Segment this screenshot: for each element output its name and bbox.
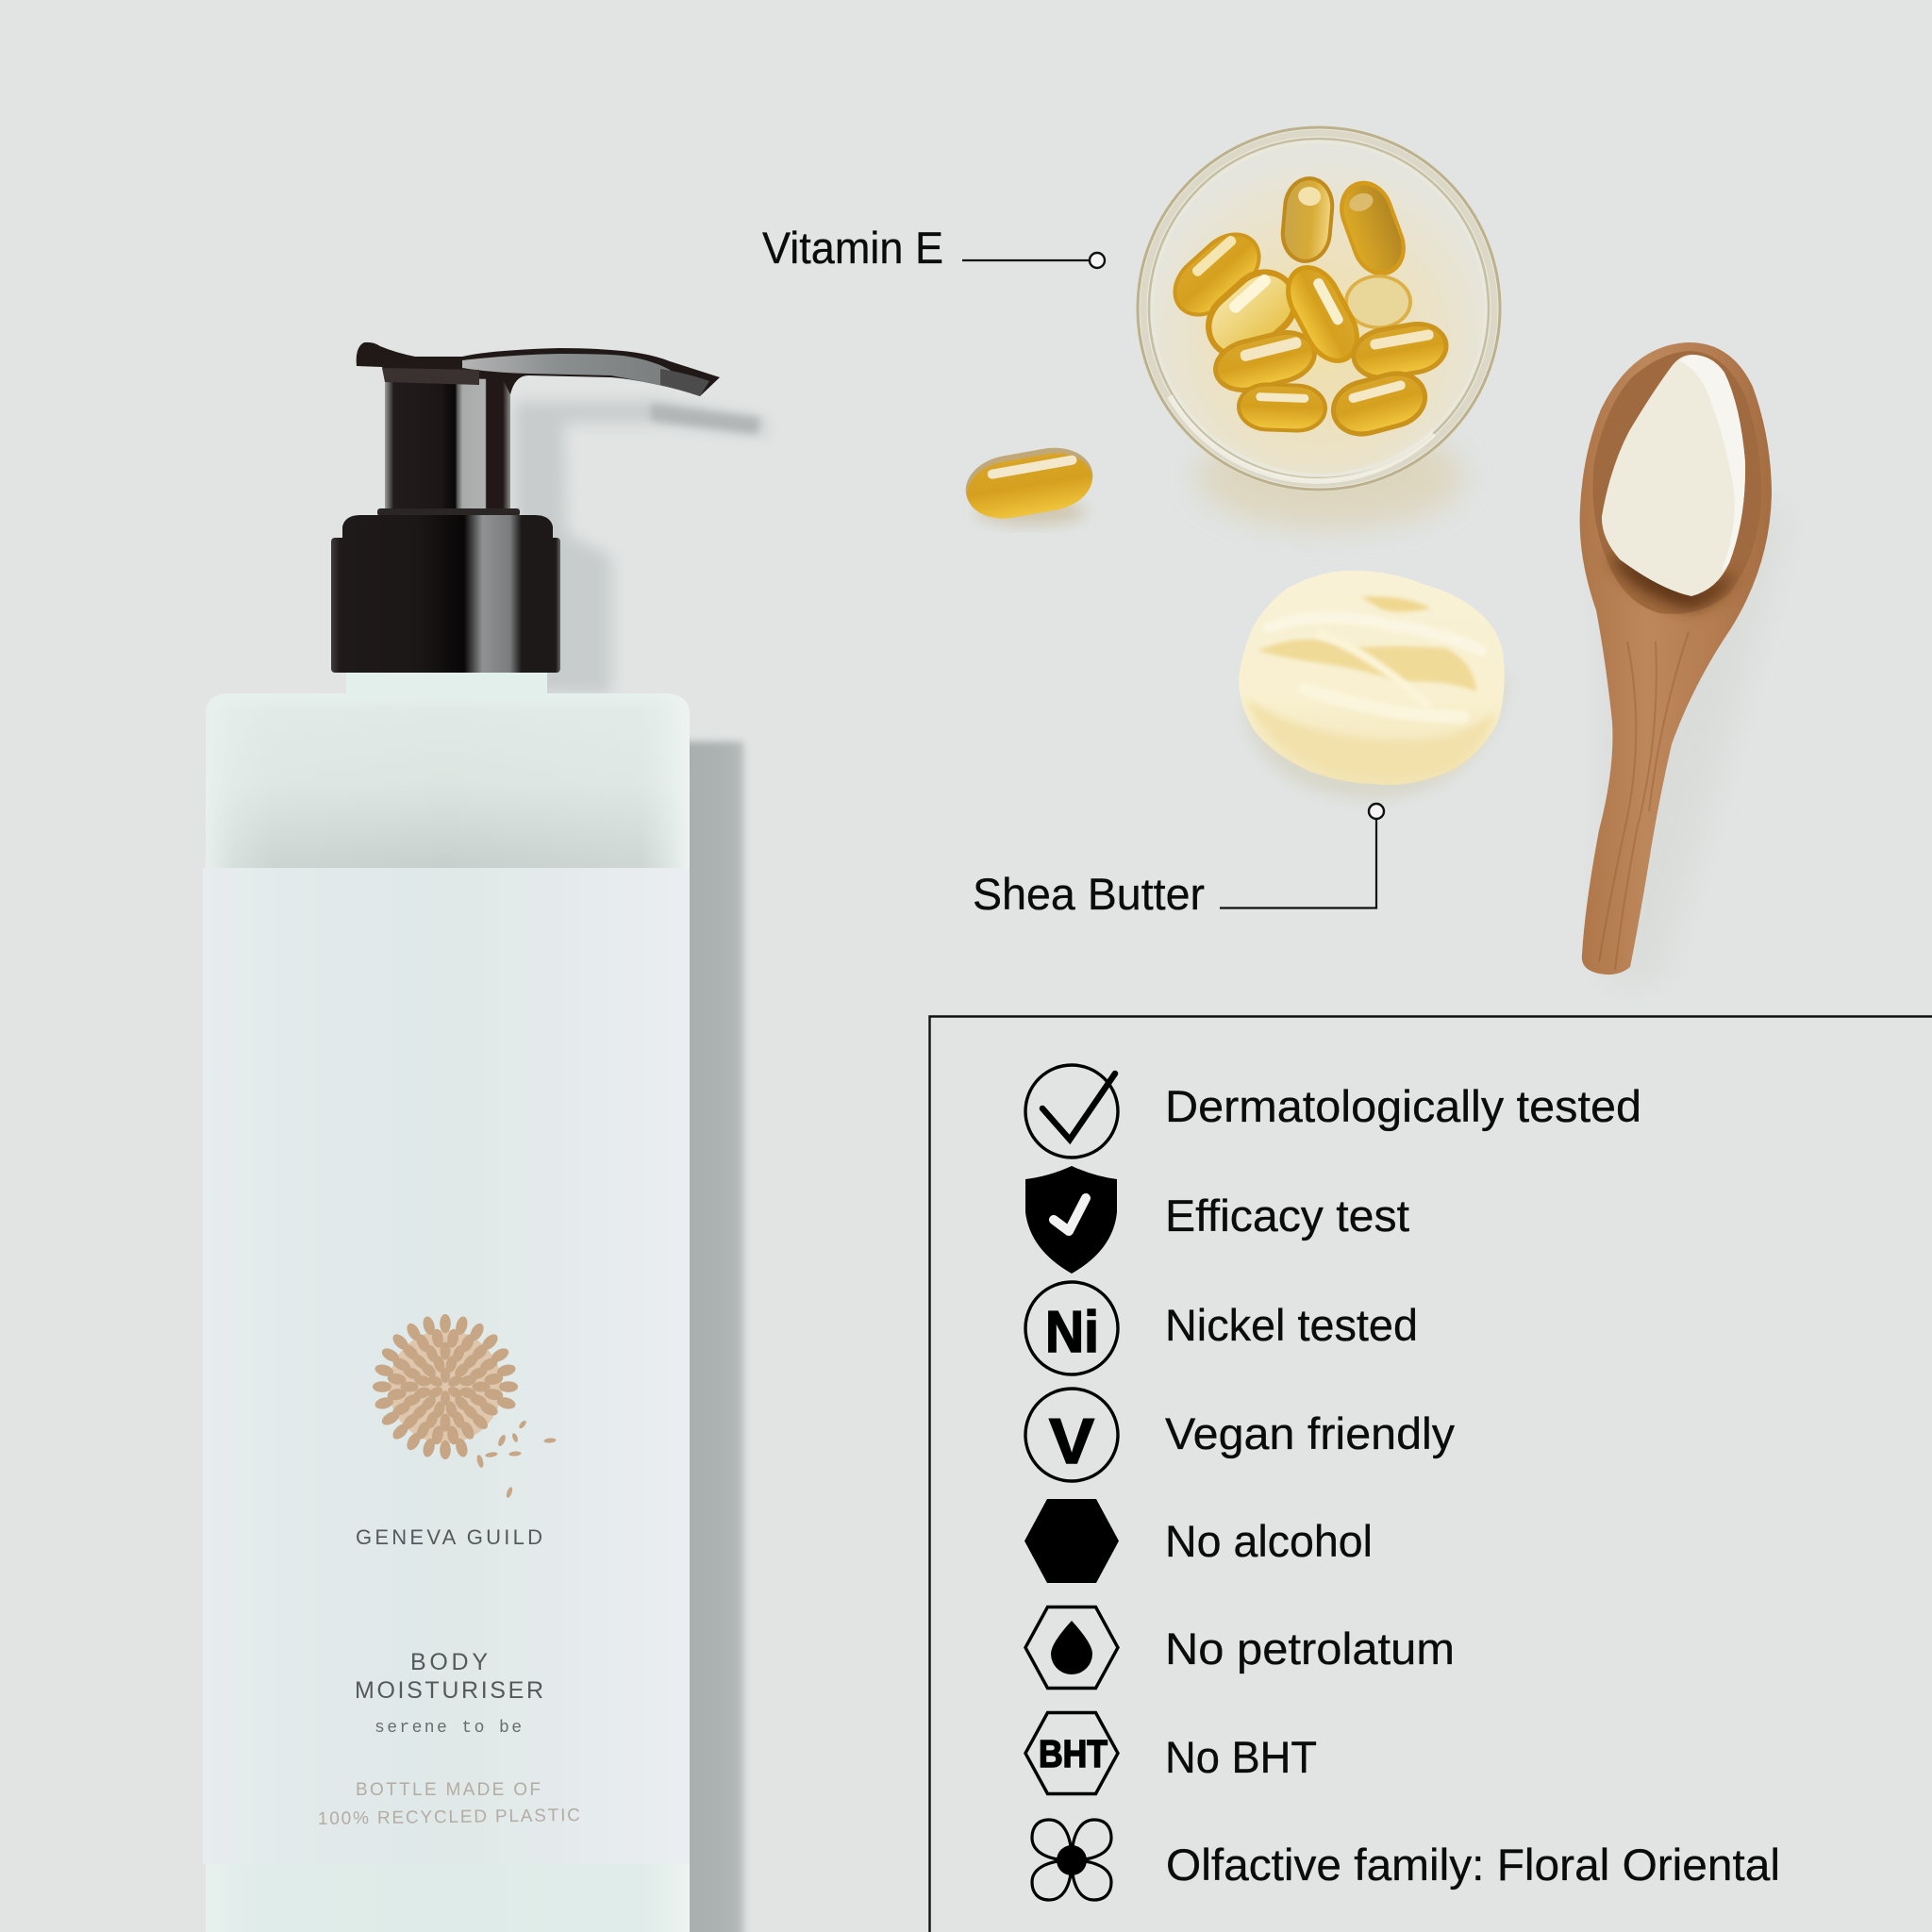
vitamin E label: Vitamin E xyxy=(762,223,943,273)
loose capsule xyxy=(960,441,1098,525)
icon: flower xyxy=(1032,1820,1111,1900)
product bottle with pump xyxy=(203,342,766,1932)
row: no BHT xyxy=(1025,1713,1317,1794)
brand logo: seed flower xyxy=(373,1314,557,1498)
icon: BHT in hexagon xyxy=(1025,1713,1118,1794)
row: nickel tested: Nickel tested xyxy=(1165,1300,1418,1350)
icon: Ni in circle: Ni xyxy=(1045,1300,1099,1365)
spoon xyxy=(1580,342,1772,974)
glass dish with vitamin E capsules xyxy=(1136,125,1502,528)
wooden spoon with butter xyxy=(1580,342,1788,981)
icon: Ni in circle xyxy=(1025,1282,1118,1374)
label text: recycled plastic note: 100% RECYCLED PLASTIC xyxy=(318,1806,580,1829)
row: olfactive family: Olfactive family: Floral Oriental xyxy=(1166,1840,1780,1890)
pump collar xyxy=(331,508,560,673)
icon: V in circle: V xyxy=(1049,1406,1094,1477)
row: vegan friendly xyxy=(1025,1389,1456,1481)
icon: check in circle xyxy=(1025,1065,1118,1158)
features panel xyxy=(930,1017,1932,1932)
row: no alcohol xyxy=(1024,1499,1373,1583)
label text: recycled plastic note: BOTTLE MADE OF xyxy=(356,1780,541,1800)
pump head spout xyxy=(357,342,720,396)
label text: brand name: GENEVA GUILD xyxy=(356,1525,542,1549)
icon: solid hexagon xyxy=(1024,1499,1119,1583)
wood grain xyxy=(1599,632,1689,970)
butter swirl shading xyxy=(1245,596,1495,778)
shea butter callout xyxy=(973,804,1384,919)
row: nickel tested xyxy=(1025,1282,1418,1374)
panel frame xyxy=(930,1017,1932,1932)
icon: drop in hexagon xyxy=(1025,1607,1118,1689)
vitamin E leader line xyxy=(962,253,1105,268)
capsules in dish xyxy=(1160,174,1453,443)
row: efficacy test xyxy=(1025,1166,1409,1274)
shea butter dollop xyxy=(1239,571,1509,800)
shea butter label: Shea Butter xyxy=(973,869,1205,919)
shea butter piece in spoon xyxy=(1602,355,1745,596)
bottle body xyxy=(206,673,690,1932)
row: olfactive family xyxy=(1032,1820,1780,1900)
row: no petrolatum xyxy=(1025,1607,1455,1689)
glass dish xyxy=(1136,125,1502,491)
label text: product name: MOISTURISER xyxy=(355,1677,543,1704)
row: no petrolatum: No petrolatum xyxy=(1165,1624,1455,1674)
spoon bowl shading xyxy=(1592,351,1761,614)
icon: V in circle xyxy=(1025,1389,1118,1481)
row: dermatologically tested: Dermatologically tested xyxy=(1165,1081,1641,1131)
row: vegan friendly: Vegan friendly xyxy=(1165,1408,1456,1458)
label text: tagline: serene to be xyxy=(375,1719,522,1738)
pump stem xyxy=(385,373,510,512)
vitamin E callout xyxy=(762,223,1105,273)
row: no alcohol: No alcohol xyxy=(1165,1516,1373,1566)
icon: shield with check xyxy=(1025,1166,1117,1274)
row: no BHT: No BHT xyxy=(1165,1732,1317,1782)
label text: product name xyxy=(355,1649,543,1704)
label text: product name: BODY xyxy=(410,1649,488,1675)
bottle and pump cast shadow xyxy=(514,401,766,1932)
icon: BHT in hexagon: BHT xyxy=(1039,1732,1108,1775)
wrap label xyxy=(203,868,690,1864)
row: dermatologically tested xyxy=(1025,1065,1641,1158)
row: efficacy test: Efficacy test xyxy=(1165,1191,1409,1241)
shea butter leader line xyxy=(1220,804,1384,908)
label text: recycled plastic note xyxy=(318,1780,580,1829)
